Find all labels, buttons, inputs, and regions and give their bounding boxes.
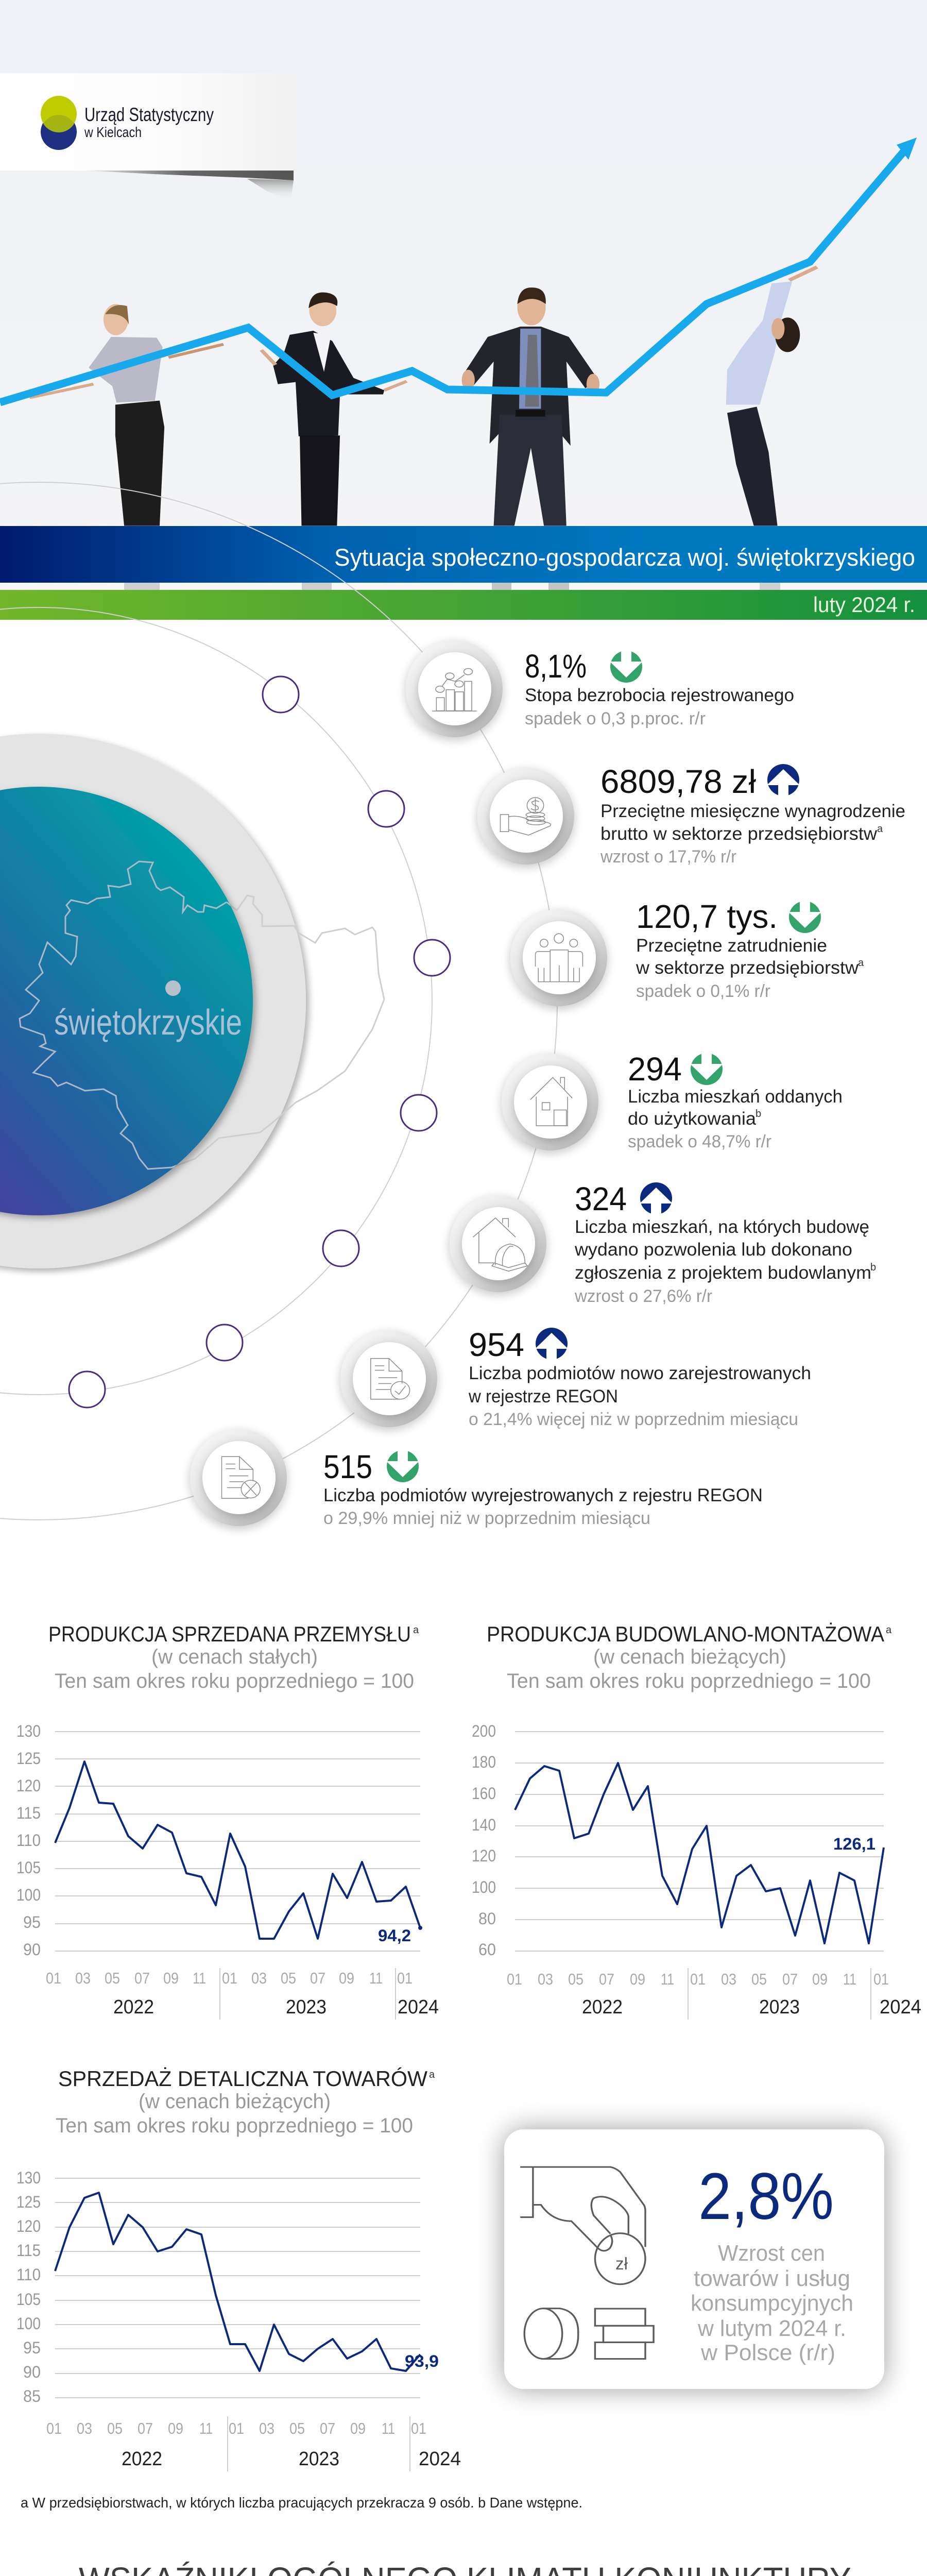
x axis labels: 05 xyxy=(107,2419,123,2437)
description xyxy=(574,1217,876,1283)
year labels: 2023 xyxy=(299,2448,339,2470)
y axis labels: 180 xyxy=(472,1753,496,1771)
description: wydano pozwolenia lub dokonano xyxy=(574,1240,852,1260)
y axis labels: 90 xyxy=(23,2363,41,2381)
x axis labels: 03 xyxy=(721,1970,736,1988)
chart title: a xyxy=(886,1624,892,1636)
icon: arrow down xyxy=(610,650,643,683)
icon: hand with coins xyxy=(500,798,551,835)
description: w lutym 2024 r. xyxy=(697,2316,846,2341)
y axis labels: 85 xyxy=(23,2387,41,2405)
chart: industrial production xyxy=(16,1622,439,2020)
person: man in suit centre xyxy=(462,287,599,526)
change: spadek o 48,7% r/r xyxy=(628,1132,771,1151)
chart title: (w cenach bieżących) xyxy=(593,1646,786,1668)
chart title: (w cenach stałych) xyxy=(151,1646,318,1668)
x axis labels: 11 xyxy=(199,2419,213,2437)
icon ring xyxy=(510,909,607,1006)
panel: inflation card xyxy=(504,2129,884,2389)
chart title xyxy=(487,1622,892,1692)
description: Liczba podmiotów nowo zarejestrowanych xyxy=(469,1363,811,1383)
y axis labels: 120 xyxy=(472,1846,496,1865)
blue title band xyxy=(0,526,927,583)
description: w sektorze przedsiębiorstw xyxy=(636,958,859,978)
icon: arrow up xyxy=(535,1328,568,1361)
x axis labels: 07 xyxy=(138,2419,153,2437)
description: w Polsce (r/r) xyxy=(700,2340,835,2365)
indicator: building permits xyxy=(450,1180,876,1306)
description xyxy=(600,801,905,844)
people illustration xyxy=(29,267,817,526)
x axis labels: 05 xyxy=(751,1970,767,1988)
icon: logo circles xyxy=(41,96,77,150)
value: 324 xyxy=(575,1180,627,1217)
person: woman xyxy=(29,304,224,526)
x axis labels: 09 xyxy=(168,2419,183,2437)
x axis labels: 05 xyxy=(289,2419,305,2437)
x axis labels: 09 xyxy=(339,1969,354,1987)
green date band: luty 2024 r. xyxy=(813,592,915,617)
orbit markers xyxy=(69,676,450,1408)
data line xyxy=(55,1761,420,1939)
big value: 2,8% xyxy=(698,2160,834,2233)
year labels: 2024 xyxy=(398,1996,439,2018)
x axis labels: 05 xyxy=(105,1969,120,1987)
icon: people xyxy=(536,934,582,982)
x axis labels: 05 xyxy=(568,1970,583,1988)
year labels: 2023 xyxy=(286,1996,327,2018)
data line xyxy=(515,1763,884,1943)
x axis labels: 03 xyxy=(259,2419,274,2437)
icon: document check xyxy=(371,1359,410,1399)
x axis labels: 07 xyxy=(782,1970,798,1988)
icon: chart xyxy=(432,668,477,711)
description: Liczba mieszkań oddanych xyxy=(628,1087,843,1107)
value: 954 xyxy=(469,1326,524,1363)
x axis labels: 01 xyxy=(873,1970,889,1988)
x axis labels: 01 xyxy=(46,2419,62,2437)
description: Przeciętne zatrudnienie xyxy=(636,936,827,956)
icon ring xyxy=(477,768,574,865)
y axis labels: 125 xyxy=(16,2193,41,2211)
change: o 21,4% więcej niż w poprzednim miesiącu xyxy=(469,1410,798,1429)
chart title: Ten sam okres roku poprzedniego = 100 xyxy=(56,2114,413,2137)
x axis labels xyxy=(46,1969,413,1987)
x axis labels: 03 xyxy=(251,1969,267,1987)
x axis labels: 01 xyxy=(46,1969,61,1987)
value: 120,7 tys. xyxy=(636,898,778,935)
map city dot xyxy=(165,980,181,996)
x axis labels: 09 xyxy=(163,1969,179,1987)
blue title band: Sytuacja społeczno-gospodarcza woj. świętokrzyskiego xyxy=(334,544,915,571)
x axis labels: 11 xyxy=(193,1969,206,1987)
data line xyxy=(55,2193,420,2371)
y axis labels: 115 xyxy=(16,1804,41,1822)
chart title: (w cenach bieżących) xyxy=(139,2090,331,2113)
chart: retail sales xyxy=(16,2066,461,2471)
description xyxy=(636,936,864,978)
icon: arrow up xyxy=(640,1182,673,1215)
indicator: dwellings completed xyxy=(502,1050,843,1151)
chart title: Ten sam okres roku poprzedniego = 100 xyxy=(55,1670,414,1692)
x axis labels: 07 xyxy=(599,1970,614,1988)
x axis labels: 07 xyxy=(320,2419,335,2437)
footnote: a W przedsiębiorstwach, w których liczba pracujących przekracza 9 osób. b Dane wstępne. xyxy=(21,2495,582,2511)
green date band xyxy=(0,590,927,620)
icon: arrow down xyxy=(690,1052,723,1085)
description: a xyxy=(858,957,864,969)
coin label: zł xyxy=(615,2254,628,2273)
change: o 29,9% mniej niż w poprzednim miesiącu xyxy=(323,1509,650,1528)
description: zgłoszenia z projektem budowlanym xyxy=(575,1263,871,1283)
last value: 126,1 xyxy=(833,1835,876,1853)
change: wzrost o 17,7% r/r xyxy=(600,847,736,867)
y axis labels: 120 xyxy=(16,1776,41,1795)
description xyxy=(468,1363,811,1406)
orbit arcs xyxy=(0,482,557,1520)
icon ring xyxy=(406,640,503,737)
x axis labels: 03 xyxy=(77,2419,92,2437)
change: spadek o 0,3 p.proc. r/r xyxy=(525,709,706,728)
year labels: 2022 xyxy=(122,2448,162,2470)
icon ring xyxy=(450,1195,546,1292)
y axis labels xyxy=(16,2168,41,2405)
y axis labels: 200 xyxy=(472,1722,496,1740)
year labels: 2022 xyxy=(582,1996,623,2018)
x axis labels xyxy=(46,2419,426,2437)
x axis labels: 01 xyxy=(507,1970,522,1988)
chart title: a xyxy=(413,1624,419,1636)
year labels: 2022 xyxy=(113,1996,154,2018)
icon: document cross xyxy=(221,1456,260,1498)
chart title: SPRZEDAŻ DETALICZNA TOWARÓW xyxy=(58,2066,427,2091)
description: Przeciętne miesięczne wynagrodzenie xyxy=(600,801,905,821)
growth arrow xyxy=(0,138,917,402)
description: Liczba podmiotów wyrejestrowanych z rejestru REGON xyxy=(323,1485,763,1505)
year labels xyxy=(122,2448,461,2470)
y axis labels: 130 xyxy=(16,1722,41,1740)
x axis labels: 05 xyxy=(281,1969,296,1987)
logo text: Urząd Statystyczny xyxy=(84,104,214,125)
indicator: deregistered REGON entities xyxy=(190,1429,763,1528)
description: brutto w sektorze przedsiębiorstw xyxy=(600,824,878,844)
year labels xyxy=(582,1996,921,2018)
y axis labels: 60 xyxy=(478,1940,496,1959)
x axis labels: 09 xyxy=(630,1970,645,1988)
logo text xyxy=(84,104,214,140)
description xyxy=(691,2241,853,2365)
y axis labels: 105 xyxy=(16,2290,41,2309)
description: Liczba mieszkań, na których budowę xyxy=(575,1217,869,1237)
y axis labels: 110 xyxy=(16,1831,41,1850)
chart title: PRODUKCJA BUDOWLANO-MONTAŻOWA xyxy=(487,1622,884,1646)
y axis labels: 130 xyxy=(16,2168,41,2187)
x axis labels: 01 xyxy=(690,1970,706,1988)
icon: house with helmet xyxy=(473,1218,527,1271)
chart title: Ten sam okres roku poprzedniego = 100 xyxy=(507,1670,871,1692)
y axis labels: 105 xyxy=(16,1858,41,1877)
indicator: wages xyxy=(477,763,905,867)
icon: arrow up xyxy=(767,764,800,797)
change: wzrost o 27,6% r/r xyxy=(574,1286,712,1306)
icon: arrow down xyxy=(386,1449,419,1482)
x axis labels: 07 xyxy=(134,1969,150,1987)
description: do użytkowania xyxy=(628,1109,757,1129)
x axis labels: 11 xyxy=(661,1970,674,1988)
description: Stopa bezrobocia rejestrowanego xyxy=(525,685,794,705)
chart title: a xyxy=(429,2069,435,2080)
last value: 94,2 xyxy=(378,1926,411,1945)
y axis labels: 100 xyxy=(16,1886,41,1904)
description: konsumpcyjnych xyxy=(691,2291,853,2316)
x axis labels: 01 xyxy=(222,1969,237,1987)
year labels: 2024 xyxy=(880,1996,921,2018)
chart title xyxy=(56,2066,435,2137)
y axis labels: 140 xyxy=(472,1816,496,1834)
value: 294 xyxy=(628,1050,682,1088)
value: 6809,78 zł xyxy=(600,763,756,800)
y axis labels: 95 xyxy=(23,2338,41,2357)
x axis labels: 11 xyxy=(843,1970,856,1988)
chart: construction production xyxy=(472,1622,921,2020)
x axis labels: 11 xyxy=(369,1969,383,1987)
x axis labels: 03 xyxy=(538,1970,553,1988)
description: towarów i usług xyxy=(694,2266,850,2291)
person: man in suit left xyxy=(261,292,407,526)
x axis labels: 09 xyxy=(350,2419,366,2437)
y axis labels: 125 xyxy=(16,1749,41,1768)
person: man reaching xyxy=(726,267,817,526)
chart title xyxy=(48,1622,419,1692)
description: Wzrost cen xyxy=(718,2241,825,2266)
icon ring xyxy=(502,1054,598,1150)
y axis labels xyxy=(472,1722,496,1959)
y axis labels: 80 xyxy=(478,1909,496,1928)
description: w rejestrze REGON xyxy=(468,1386,618,1406)
value: 8,1% xyxy=(525,648,587,685)
last value: 93,9 xyxy=(405,2352,439,2370)
x axis labels: 01 xyxy=(411,2419,426,2437)
y axis labels: 115 xyxy=(16,2241,41,2260)
y axis labels: 100 xyxy=(472,1878,496,1896)
y axis labels: 95 xyxy=(23,1913,41,1931)
icon: hand with coin xyxy=(520,2167,654,2359)
y axis labels: 90 xyxy=(23,1940,41,1959)
icon ring xyxy=(340,1330,437,1427)
change: spadek o 0,1% r/r xyxy=(636,981,770,1001)
y axis labels: 100 xyxy=(16,2314,41,2333)
x axis labels: 01 xyxy=(229,2419,244,2437)
x axis labels: 07 xyxy=(310,1969,325,1987)
y axis labels xyxy=(16,1722,41,1959)
logo text: w Kielcach xyxy=(84,124,142,140)
description xyxy=(628,1087,843,1129)
x axis labels: 01 xyxy=(397,1969,413,1987)
hero photo panel xyxy=(0,0,927,590)
x axis labels: 03 xyxy=(75,1969,91,1987)
description: b xyxy=(870,1262,876,1273)
value: 515 xyxy=(323,1448,372,1485)
description: a xyxy=(877,823,883,835)
indicator: new REGON entities xyxy=(340,1326,811,1429)
indicator: employment xyxy=(510,898,864,1006)
x axis labels: 09 xyxy=(812,1970,828,1988)
year labels: 2023 xyxy=(759,1996,800,2018)
y axis labels: 120 xyxy=(16,2217,41,2235)
icon: house xyxy=(530,1077,572,1126)
x axis labels xyxy=(507,1970,889,1988)
chart title: PRODUKCJA SPRZEDANA PRZEMYSŁU xyxy=(48,1622,411,1646)
indicator: unemployment xyxy=(406,640,794,737)
x axis labels: 11 xyxy=(382,2419,395,2437)
region name: świętokrzyskie xyxy=(54,1002,242,1042)
y axis labels: 160 xyxy=(472,1784,496,1803)
y axis labels: 110 xyxy=(16,2265,41,2284)
icon: arrow down xyxy=(788,900,821,933)
description: b xyxy=(756,1108,761,1120)
central disc with map xyxy=(0,734,384,1268)
icon ring xyxy=(190,1429,287,1526)
year labels xyxy=(113,1996,439,2018)
year labels: 2024 xyxy=(419,2448,461,2470)
logo panel xyxy=(0,73,296,200)
